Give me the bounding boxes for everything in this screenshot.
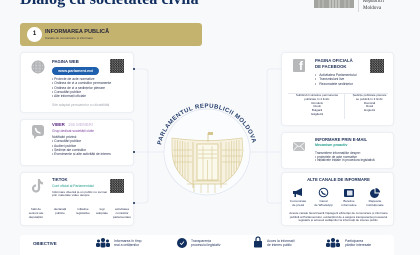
panel: pagina web: • Proiecte de acte normative [52,77,94,81]
objective: participare: părților interesate [345,243,371,247]
objective: acces: de interes public [267,243,292,247]
panel: objective: OBIECTIVE [33,240,57,246]
panel: tiktok: Cont oficial al Parlamentului [52,184,94,188]
panel: alte canale de informare [281,172,394,226]
panel: pagina web: • Ordinea de zi a comisiilor permanente [52,81,111,85]
panel: facebook [281,52,394,126]
icon: viber [32,125,44,139]
tiktok topics: adoptate [96,211,108,215]
panel: facebook: PAGINA OFICIALĂ [315,58,353,63]
panel: viber: • Audieri publice [52,144,76,148]
central emblem: parlamentul republicii moldova: PARLAMENTUL REPUBLICII MOLDOVA [157,104,256,145]
icon: whatsapp [318,188,328,198]
panel: email [281,132,394,169]
icon: bulletin [344,189,354,197]
objective: participare: Participarea [345,238,363,242]
panel: viber: • Evenimente și alte activități de interes [52,152,111,156]
panel: viber: Grup dedicat societății civile [52,128,94,132]
building [172,132,243,193]
panel: viber: VIBER 155 MEMBRI [52,122,93,127]
panel: alte canale de informare: informative [341,203,357,207]
facebook columns: Rusă [313,104,320,108]
panel: objective [20,235,394,255]
panel: alte canale de informare: Rapoarte [369,199,381,203]
panel: tiktok: TIKTOK [52,177,68,182]
qr code [110,179,124,193]
panel: alte canale de informare: de presă [292,203,304,207]
panel: alte canale de informare: instituționale [366,203,384,207]
panel: facebook: • Transmisiuni live [315,77,344,81]
parliament logo [314,0,384,12]
panel: pagina web: • Ordinea de zi a ședințelor plenare [52,86,105,90]
tiktok topics: comisiilor [116,211,128,215]
panel: email: • inițiativele inițiale în procedura legislativă [315,158,375,162]
objective: transparenta: procesului legislativ [191,243,220,247]
tiktok topics: parlamentare [113,215,131,219]
link button [52,67,99,75]
section banner: informarea publica [20,23,202,46]
tiktok topics: deputaților [29,215,43,219]
panel: facebook: DE FACEBOOK [315,64,347,69]
panel: facebook: Engleză [364,108,375,112]
section banner: informarea publica: Canale de comunicare și informare [45,36,93,40]
tiktok topics: sesiuni ale [29,211,43,215]
objective: informarea [96,238,142,248]
icon: facebook [293,59,305,72]
panel: facebook: Ședințe publicate plenare [353,93,386,97]
panel: alte canale de informare: Canal [319,199,328,203]
tiktok topics: legislative [76,211,90,215]
facebook columns [296,93,338,116]
panel: facebook: • Rezumatele ședințelor [315,82,353,86]
panel: pagina web: • Alte informații oficiale [52,94,86,98]
panel: alte canale de informare: legislativ și accesul cetățenilor la informații de interes public. [299,218,378,222]
panel: alte canale de informare: Aceste canale favorizează înțelegerii eficienței de comunicare și informare [289,211,388,215]
panel: alte canale de informare: Buletine [343,199,355,203]
section banner: informarea publica: 1 [33,31,36,37]
tiktok topics: halti de [31,207,41,211]
tiktok topics: legi [100,207,104,211]
panel: viber: • Consultări publice [52,139,81,143]
objective: transparenta [177,238,220,248]
section banner: informarea publica: INFORMAREA PUBLICĂ [45,28,109,34]
panel: email: Transmitere informațiilor despre: [315,151,361,155]
objective: acces [254,236,295,248]
panel: viber: • Ședințe ale comisiilor [52,148,86,152]
tiktok topics: inițiative [77,207,89,211]
panel: pagina web: Site adaptat persoanelor cu dizabilități [52,103,109,107]
panel: alte canale de informare: Comunicate [290,199,306,203]
panel: tiktok: Informare diversă și-un public nu tocmai [52,190,107,194]
objective: informarea: Informarea în timp [114,238,142,242]
objective: acces: Acces la informații [267,238,295,242]
tiktok topics: publice [55,211,65,215]
parliament logo: Moldova [363,6,381,10]
icon: megaphone [293,188,302,197]
panel: tiktok [20,172,134,226]
panel: pagina web [20,52,134,113]
panel: pagina web: PAGINA WEB [52,59,79,64]
facebook columns: Găgăuză [311,112,323,116]
objective: informarea: real a cetățenilor [114,243,139,247]
icon: pie chart [370,188,380,198]
connector dots [133,68,135,204]
icon: globe [32,60,44,74]
objective: participare [326,238,371,248]
icon: tiktok [32,179,44,193]
panel: email: INFORMARE PRIN E-MAIL [315,136,367,142]
qr code [370,59,384,73]
tiktok topics: declarații [54,207,66,211]
panel: tiktok: prin materiale video despre: [52,193,90,197]
objective: transparenta: Transparența [191,238,211,242]
panel: facebook: Română [364,101,375,105]
panel: facebook: se publică în 3 limbi: [356,97,383,101]
panel: pagina web: • Consultări publice [52,90,81,94]
panel: alte canale de informare: ALTE CANALE DE INFORMARE [307,176,370,182]
panel: facebook: • Activitatea Parlamentului [315,73,357,77]
qr code [110,59,124,73]
panel: viber [20,119,134,166]
facebook columns: Română [311,101,323,105]
facebook columns: publicate în 4 limbi: [304,97,330,101]
panel: email: • proiectele de acte normative [315,155,357,159]
icon: envelope [293,142,305,151]
link button: www.parlament.md [58,69,93,73]
panel: alte canale de informare: de WhatsApp [314,203,333,207]
tiktok topics [28,207,131,219]
facebook columns: Bulgară [312,108,322,112]
tiktok topics: activitatea [115,207,129,211]
panel: email: Mecanism proactiv [315,143,347,147]
central emblem: parlamentul republicii moldova [157,104,256,196]
facebook columns: Subtitrubri sintetice permanente [296,93,338,97]
panel: alte canale de informare: publică al Parlamentului, evidențiind de a asigura transparența procesului [290,215,387,219]
panel: facebook: Rusă [366,104,373,108]
panel: viber: Notificări privind: [52,135,77,139]
